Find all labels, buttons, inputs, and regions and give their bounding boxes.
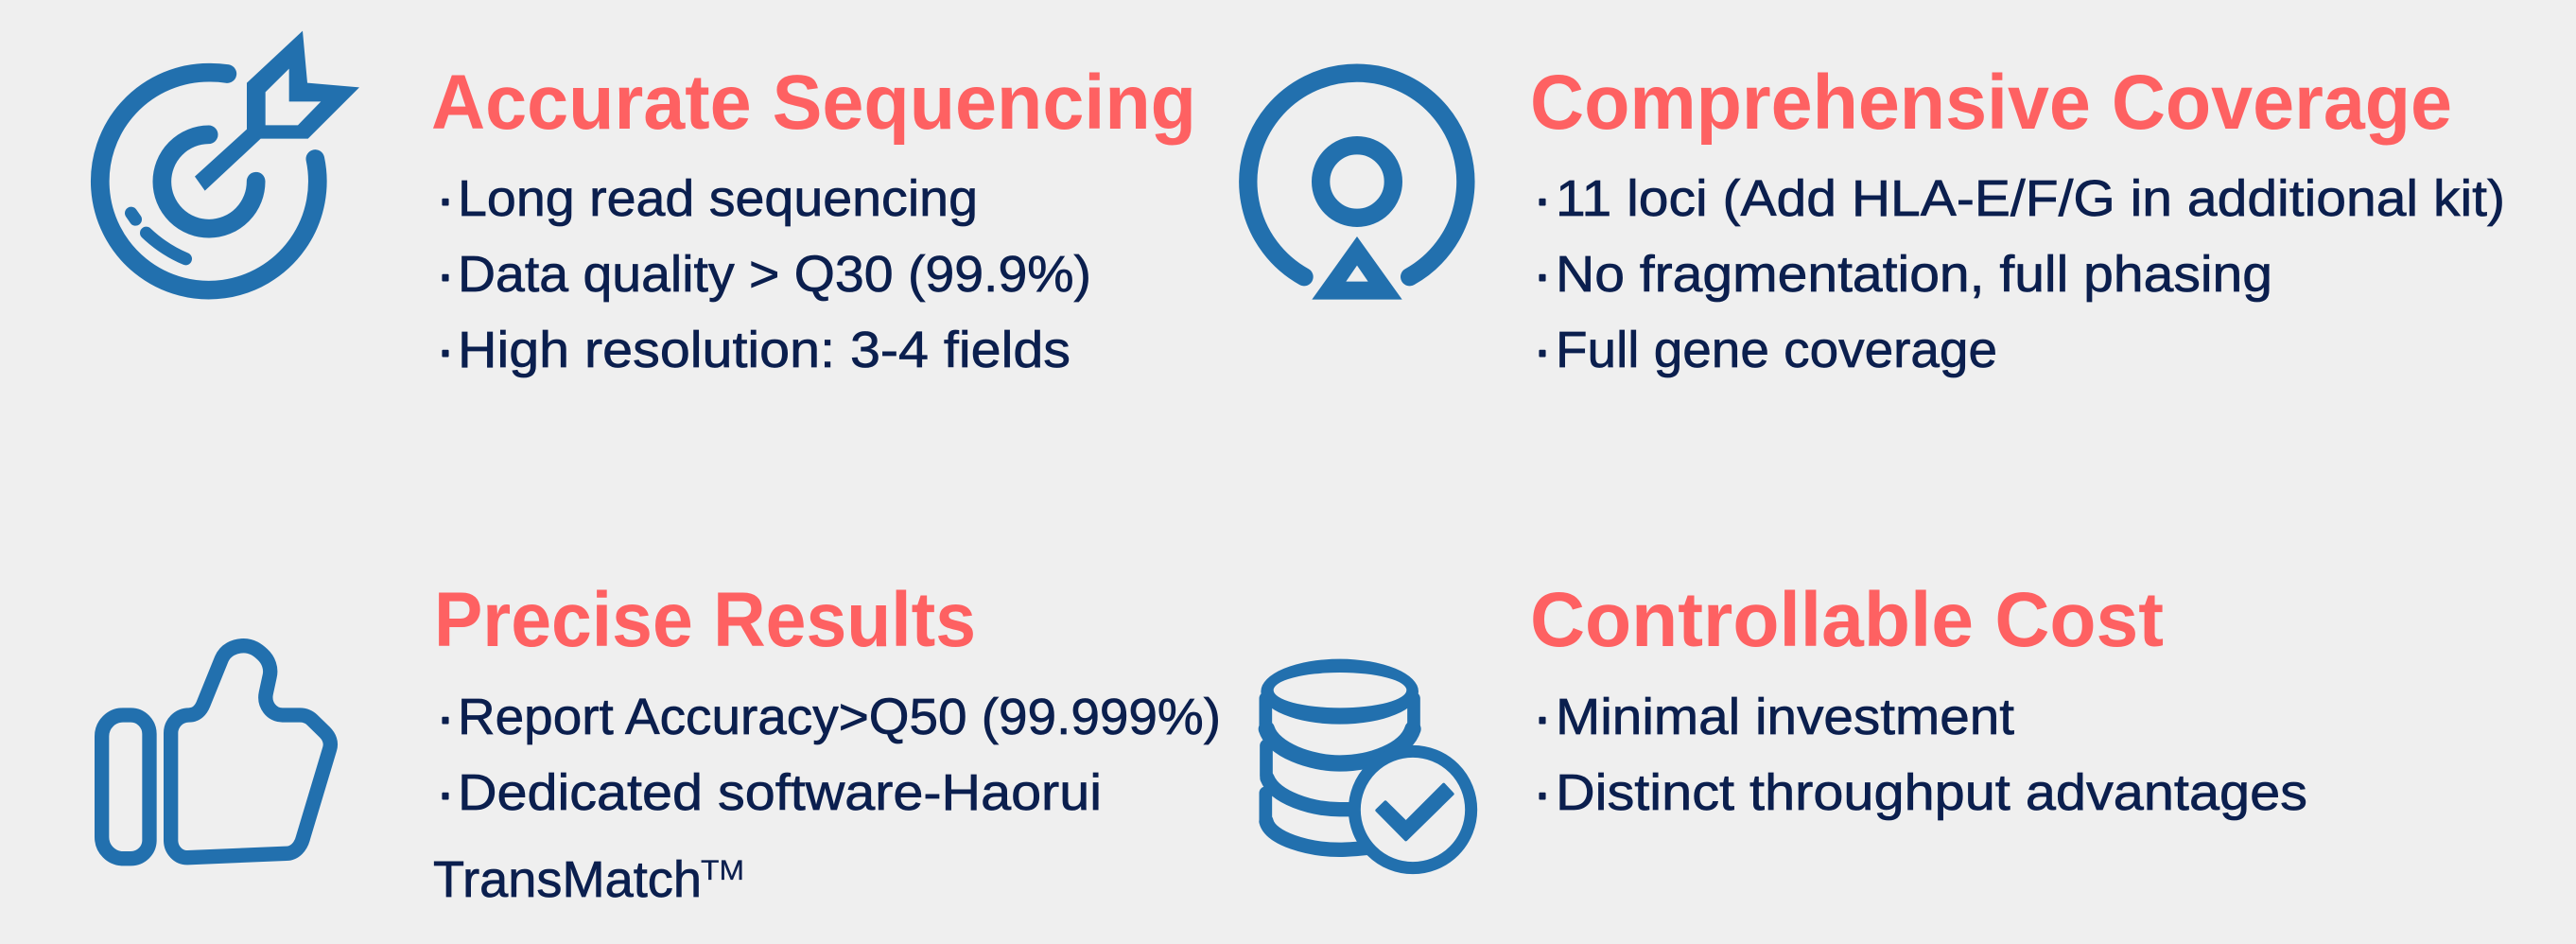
- feature list: [433, 689, 1221, 908]
- feature list: Distinct throughput advantages: [1556, 764, 2307, 821]
- panel: precise results: [102, 577, 1221, 908]
- feature list: Data quality > Q30 (99.9%): [458, 246, 1091, 303]
- heading: Precise Results: Precise Results: [434, 577, 976, 663]
- feature list: TM: [701, 855, 744, 886]
- icon: database stack with check: [1261, 659, 1471, 868]
- heading: Comprehensive Coverage: Comprehensive Coverage: [1530, 60, 2452, 146]
- feature list: ·: [437, 764, 454, 821]
- feature list: Full gene coverage: [1556, 322, 1997, 378]
- feature list: ·: [1534, 246, 1551, 303]
- icon: thumbs up: [102, 646, 330, 859]
- icon: ring with circle and triangle: [1248, 73, 1466, 300]
- feature list: Dedicated software-Haorui: [458, 764, 1102, 821]
- feature list: TransMatch: [433, 851, 702, 908]
- panel: controllable cost: [1261, 577, 2307, 868]
- feature list: ·: [437, 246, 454, 303]
- feature list: ·: [1534, 170, 1551, 227]
- feature list: [1534, 689, 2307, 821]
- feature list: High resolution: 3-4 fields: [458, 322, 1070, 378]
- feature list: ·: [1534, 764, 1551, 821]
- feature list: Long read sequencing: [458, 170, 978, 227]
- feature list: Report Accuracy>Q50 (99.999%): [458, 689, 1221, 745]
- icon: target with arrow: [100, 31, 359, 290]
- feature list: No fragmentation, full phasing: [1556, 246, 2272, 303]
- feature list: 11 loci (Add HLA-E/F/G in additional kit): [1556, 170, 2505, 227]
- feature list: ·: [437, 170, 454, 227]
- feature list: ·: [437, 689, 454, 745]
- feature list: [1534, 170, 2505, 378]
- feature list: Minimal investment: [1556, 689, 2014, 745]
- panel: accurate sequencing: [100, 31, 1196, 378]
- feature list: [437, 170, 1091, 378]
- feature list: ·: [1534, 689, 1551, 745]
- panel: comprehensive coverage: [1248, 60, 2505, 378]
- feature list: ·: [1534, 322, 1551, 378]
- heading: Controllable Cost: Controllable Cost: [1530, 577, 2164, 663]
- feature list: ·: [437, 322, 454, 378]
- heading: Accurate Sequencing: Accurate Sequencing: [431, 60, 1196, 146]
